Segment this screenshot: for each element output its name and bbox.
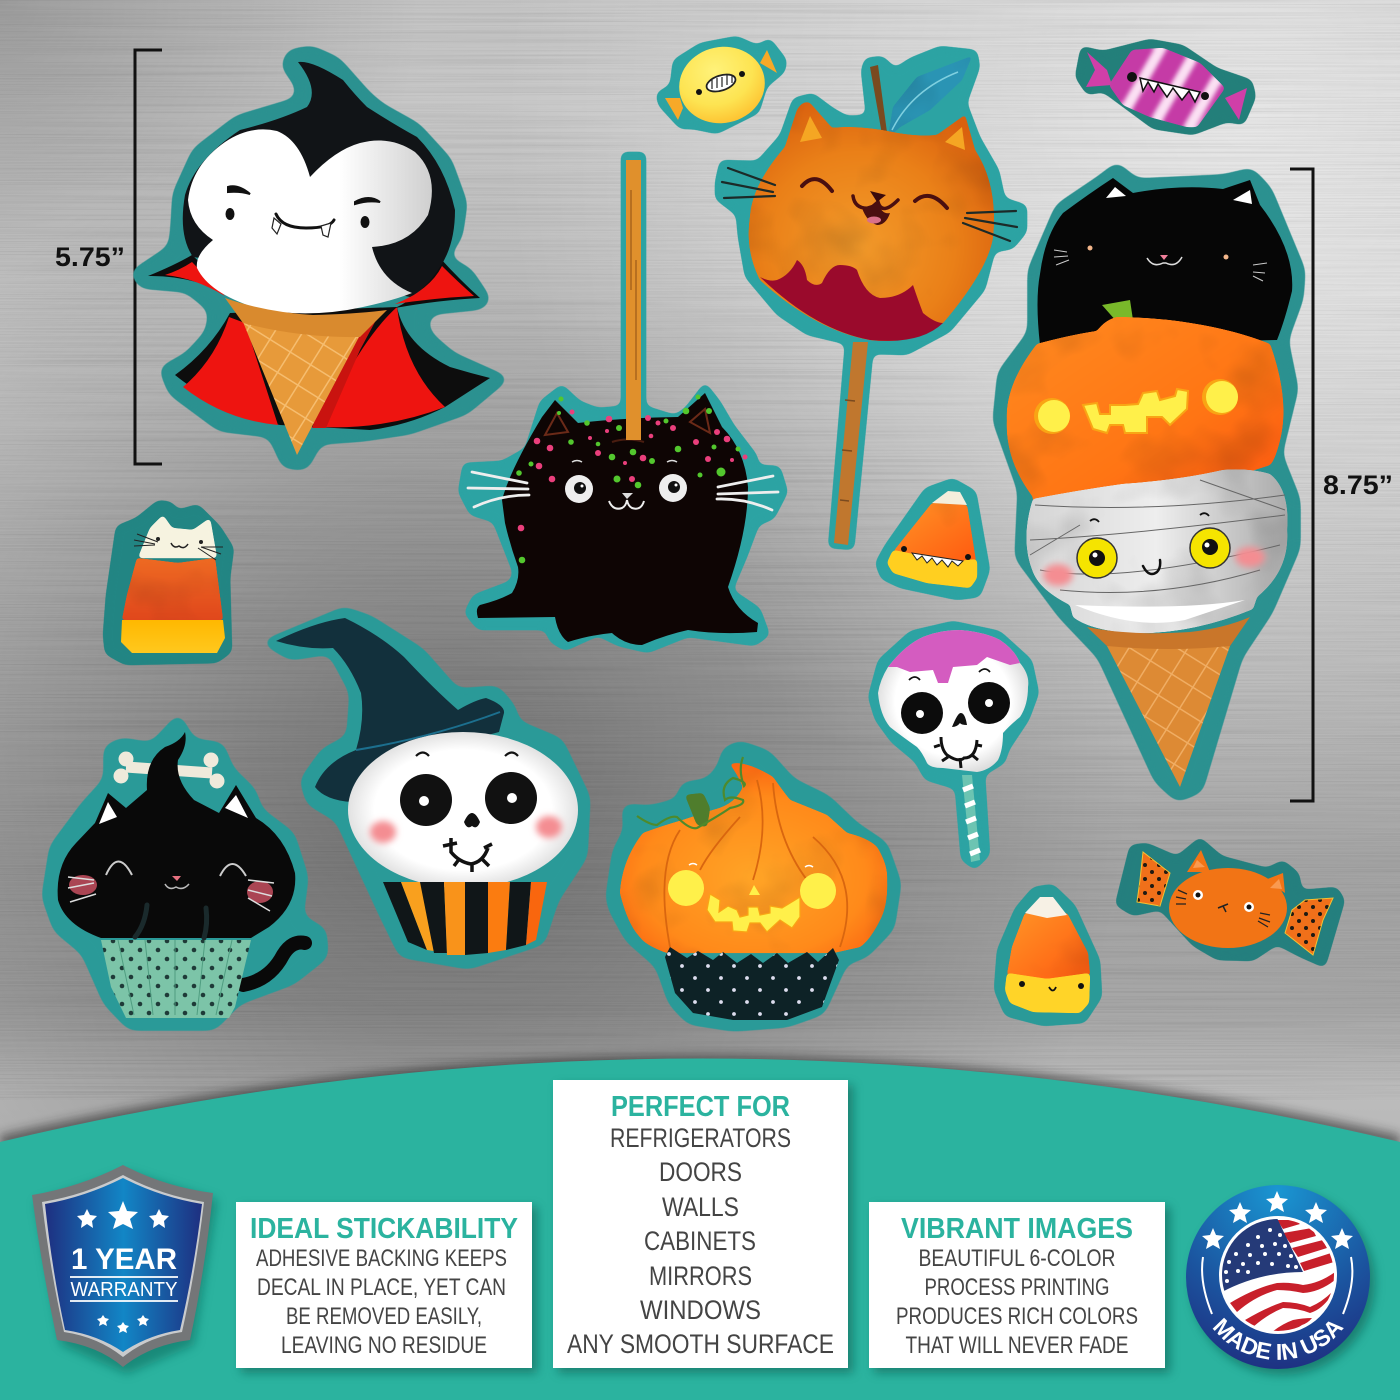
sticker: triple scoop cat pumpkin mummy cone (993, 162, 1305, 802)
black cat scoop (1038, 178, 1292, 345)
card: vibrant images: VIBRANT IMAGES (901, 1213, 1133, 1245)
made in USA seal (1186, 1185, 1380, 1380)
card: ideal stickability: BE REMOVED EASILY, (286, 1303, 482, 1330)
sticker: candy corn cat (103, 500, 234, 665)
warranty shield badge: 1 YEAR (71, 1243, 177, 1276)
warranty shield badge (32, 1165, 217, 1374)
sticker: pink striped candy (1075, 39, 1256, 135)
sticker: yellow candy (656, 36, 787, 134)
card: perfect for: PERFECT FOR (611, 1091, 790, 1123)
card: vibrant images: THAT WILL NEVER FADE (906, 1332, 1128, 1359)
card: vibrant images (869, 1202, 1170, 1373)
dimension bracket: left 5.75 (55, 50, 162, 464)
sticker: black cat cupcake with bone (42, 713, 328, 1030)
card: vibrant images: PRODUCES RICH COLORS (896, 1303, 1138, 1330)
sticker: black cat candy apple with sprinkles (458, 152, 788, 653)
card: ideal stickability: IDEAL STICKABILITY (250, 1213, 518, 1245)
dimension bracket: right 8.75 (1290, 169, 1393, 801)
sticker: jack-o-lantern cupcake (606, 741, 901, 1031)
card: perfect for: CABINETS (644, 1226, 756, 1256)
card: vibrant images: PROCESS PRINTING (924, 1274, 1110, 1301)
sticker: skull lollipop (868, 621, 1039, 870)
card: perfect for: DOORS (659, 1157, 742, 1187)
bottom teal band (0, 1055, 1400, 1400)
sticker: candy corn with smile (875, 478, 990, 600)
made in USA seal: MADE IN USA (1212, 1318, 1344, 1360)
card: perfect for: WALLS (662, 1192, 739, 1222)
sticker: candy corn small (994, 884, 1102, 1026)
sticker: orange cat candy (1115, 837, 1345, 968)
bone (114, 752, 224, 788)
card: ideal stickability: LEAVING NO RESIDUE (281, 1332, 487, 1359)
card: ideal stickability (236, 1202, 537, 1373)
dimension bracket: right 8.75: 8.75” (1323, 470, 1393, 500)
sticker: orange cat caramel apple (715, 46, 1027, 550)
card: perfect for: REFRIGERATORS (610, 1123, 791, 1153)
warranty shield badge: WARRANTY (70, 1279, 178, 1301)
sprinkles (518, 410, 748, 531)
card: perfect for: WINDOWS (640, 1295, 761, 1325)
card: ideal stickability: ADHESIVE BACKING KEEPS (256, 1245, 507, 1272)
mummy scoop (1026, 470, 1287, 633)
card: vibrant images: BEAUTIFUL 6-COLOR (918, 1245, 1116, 1272)
witch hat (276, 618, 504, 802)
card: perfect for: ANY SMOOTH SURFACE (567, 1329, 834, 1359)
dimension bracket: left 5.75: 5.75” (55, 242, 125, 272)
jack-o-lantern pumpkin scoop (1007, 317, 1283, 505)
card: ideal stickability: DECAL IN PLACE, YET CAN (257, 1274, 506, 1301)
card: perfect for: MIRRORS (649, 1261, 752, 1291)
sticker: vampire ice cream cone (130, 46, 510, 470)
sticker: witch hat skull cupcake (260, 607, 590, 969)
card: perfect for (553, 1080, 853, 1373)
